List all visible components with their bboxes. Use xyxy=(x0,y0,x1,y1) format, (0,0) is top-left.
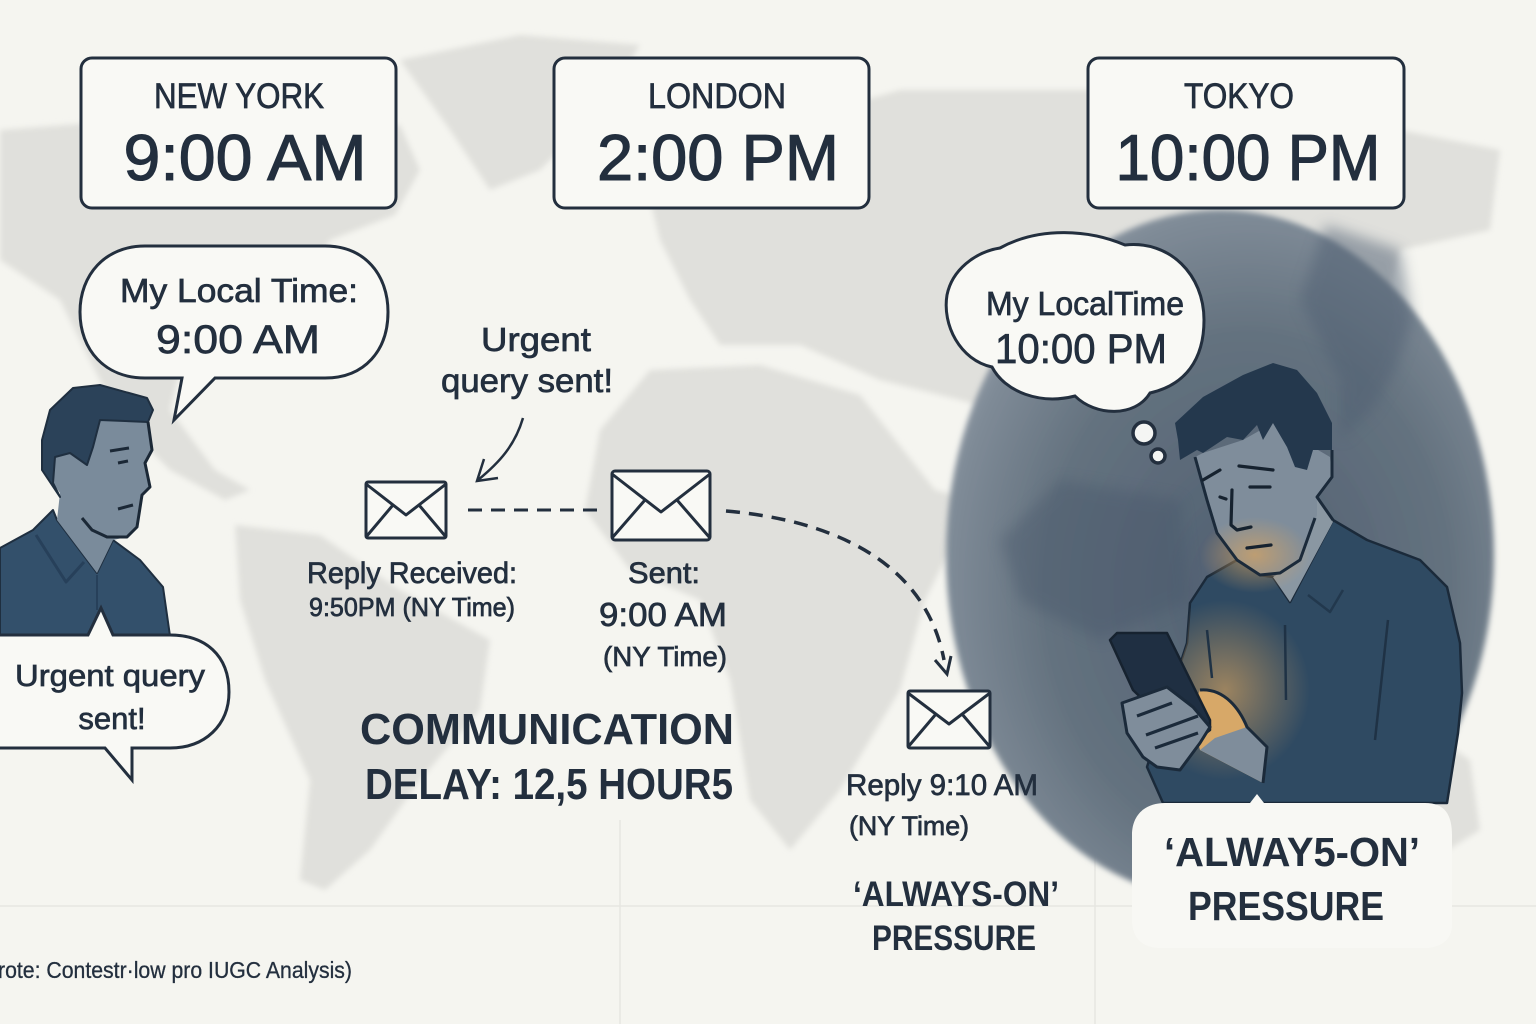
speech bubble: New York local time: My Local Time: xyxy=(120,272,358,309)
icon: envelope reply xyxy=(908,691,990,748)
source note: rote: Contestr·low pro IUGC Analysis) xyxy=(0,957,352,983)
icon: envelope sent xyxy=(612,471,710,540)
text: reply time xyxy=(846,769,1038,841)
thought bubble: Tokyo local time: 10:00 PM xyxy=(995,325,1167,372)
thought bubble: Tokyo local time: My LocalTime xyxy=(986,285,1184,322)
dashed arrow to Tokyo envelope xyxy=(726,511,951,674)
clock: Tokyo xyxy=(1088,58,1404,208)
label box: always-on pressure: PRESSURE xyxy=(1188,883,1384,929)
label: urgent query sent xyxy=(441,321,613,399)
person: Tokyo worker with phone xyxy=(1110,363,1462,803)
text: reply time: Reply 9:10 AM xyxy=(846,769,1038,802)
person: New York worker xyxy=(0,385,170,636)
thought bubble: Tokyo local time xyxy=(946,233,1204,463)
clock: London xyxy=(554,58,869,208)
text: reply received xyxy=(307,557,517,622)
speech bubble: New York local time xyxy=(80,246,388,420)
heading: communication delay: DELAY: 12,5 HOUR5 xyxy=(365,760,733,809)
night globe: Tokyo xyxy=(946,210,1494,900)
text: sent time: 9:00 AM xyxy=(599,596,727,633)
clock: Tokyo: 10:00 PM xyxy=(1116,121,1380,194)
icon: envelope reply received xyxy=(366,482,446,538)
label: urgent query sent: query sent! xyxy=(441,362,613,399)
speech bubble: urgent query, left: sent! xyxy=(78,701,146,736)
label box: always-on pressure xyxy=(1132,794,1452,948)
text: reply received: Reply Received: xyxy=(307,557,517,590)
label: urgent query sent: Urgent xyxy=(481,321,591,358)
speech bubble: urgent query, left xyxy=(0,608,229,780)
clock: London: LONDON xyxy=(648,77,786,116)
heading: communication delay: COMMUNICATION xyxy=(360,705,734,754)
clock: New York: 9:00 AM xyxy=(124,121,366,194)
text: reply received: 9:50PM (NY Time) xyxy=(309,592,515,622)
heading: communication delay xyxy=(360,705,734,809)
label box: always-on pressure: ‘ALWAY5-ON’ xyxy=(1164,829,1420,875)
clock: London: 2:00 PM xyxy=(597,121,839,194)
speech bubble: urgent query, left: Urgent query xyxy=(15,658,206,693)
text: sent time xyxy=(599,557,727,672)
text: sent time: Sent: xyxy=(628,557,700,590)
text: sent time: (NY Time) xyxy=(603,641,727,672)
text: reply time: (NY Time) xyxy=(849,811,969,841)
arrow: query to envelope xyxy=(477,418,523,481)
label: always-on pressure: PRESSURE xyxy=(872,919,1036,958)
clock: New York xyxy=(81,58,396,208)
dashed connector between envelopes xyxy=(468,508,598,512)
label: always-on pressure: ‘ALWAYS-ON’ xyxy=(853,875,1059,914)
speech bubble: New York local time: 9:00 AM xyxy=(156,318,320,362)
label: always-on pressure xyxy=(853,875,1059,958)
clock: Tokyo: TOKYO xyxy=(1184,77,1294,116)
clock: New York: NEW YORK xyxy=(154,77,324,116)
